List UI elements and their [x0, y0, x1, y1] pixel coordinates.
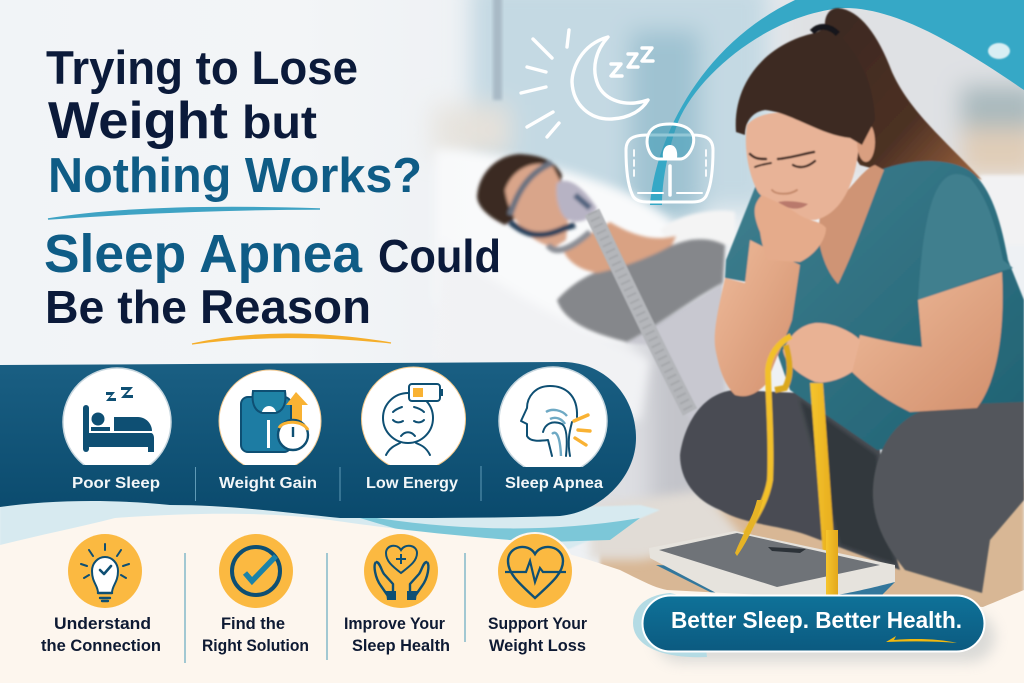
- label: Improve Your Sleep Health: [344, 614, 450, 655]
- tape measure strip: [810, 383, 838, 595]
- shirt: [725, 161, 1024, 450]
- label: Sleep Apnea: Sleep Apnea: [505, 475, 603, 492]
- heading: Sleep Apnea Could: Sleep Apnea: [44, 224, 363, 284]
- benefit: improve your sleep health: [344, 534, 450, 655]
- icon: weight gain scale: [219, 370, 321, 492]
- label: Low Energy: Low Energy: [366, 475, 458, 492]
- ear: [857, 122, 875, 162]
- icon group: four problem badges: [63, 367, 607, 492]
- left arm: [715, 240, 800, 396]
- heading: Be the Reason: Reason: [200, 280, 371, 333]
- callout: Better Sleep. Better Health.: [633, 593, 995, 662]
- benefit: understand the connection: [41, 534, 161, 655]
- underline: yellow brush stroke: [192, 334, 391, 344]
- icon: moon and zzz: [521, 30, 653, 137]
- title block: [44, 41, 501, 344]
- icon: poor sleep bed: [63, 368, 171, 492]
- heading: Sleep Apnea Could: Could: [378, 230, 501, 282]
- label: Weight Gain: Weight Gain: [219, 475, 317, 492]
- label: Support Your Weight Loss: Support Your: [488, 614, 587, 633]
- label: Understand the Connection: Understand: [54, 614, 151, 633]
- callout: Better Sleep. Better Health.: Better Sleep. Better Health.: [671, 607, 962, 633]
- photo: woman on floor with tape measure: [680, 8, 1024, 595]
- fist: [755, 195, 826, 262]
- heading: Weight but: but: [242, 96, 317, 148]
- teal arc behind the woman: [650, 0, 1024, 205]
- icon: white outline scale: [626, 124, 713, 202]
- photo: bathroom scale: [649, 500, 895, 597]
- label: Support Your Weight Loss: Weight Loss: [489, 636, 586, 655]
- heading: Weight but: Weight: [48, 92, 228, 150]
- benefit row: [41, 532, 587, 655]
- banner: dark blue band: [0, 362, 636, 518]
- photo: man sleeping with CPAP mask: [477, 154, 725, 342]
- heading: Weight but: [48, 92, 317, 150]
- lips: [778, 201, 808, 209]
- label: Improve Your Sleep Health: Sleep Health: [352, 636, 450, 655]
- face details: [750, 152, 815, 194]
- label: Improve Your Sleep Health: Improve Your: [344, 614, 445, 633]
- heading: Nothing Works?: Nothing Works?: [48, 149, 422, 203]
- hair front: [736, 28, 875, 145]
- right arm: [850, 272, 1003, 412]
- hair behind: [825, 8, 982, 180]
- label: Find the Right Solution: Find the: [221, 614, 285, 633]
- benefit: find the right solution: [202, 534, 309, 655]
- holding hand: [783, 323, 860, 383]
- underline: teal brush stroke: [48, 207, 320, 219]
- label: Find the Right Solution: [202, 614, 309, 655]
- label: Understand the Connection: the Connection: [41, 636, 161, 655]
- icon: sleep apnea airway: [499, 367, 607, 492]
- label: Support Your Weight Loss: [488, 614, 587, 655]
- heading: Be the Reason: [45, 280, 371, 333]
- right leg: [873, 402, 1024, 593]
- face: [746, 113, 860, 220]
- tape measure loop: [736, 336, 791, 553]
- icon: low energy face: [362, 367, 466, 492]
- heading: Trying to Lose: Trying to Lose: [46, 41, 358, 94]
- label: Understand the Connection: [41, 614, 161, 655]
- benefit: support your weight loss: [488, 532, 587, 655]
- label: Poor Sleep: Poor Sleep: [72, 475, 160, 492]
- left leg: [680, 390, 900, 570]
- photo: CPAP hose: [592, 212, 690, 412]
- label: Find the Right Solution: Right Solution: [202, 636, 309, 655]
- neck: [818, 165, 884, 284]
- bottom cream wave panel: [0, 500, 1024, 683]
- heading: Be the Reason: Be the: [45, 281, 187, 333]
